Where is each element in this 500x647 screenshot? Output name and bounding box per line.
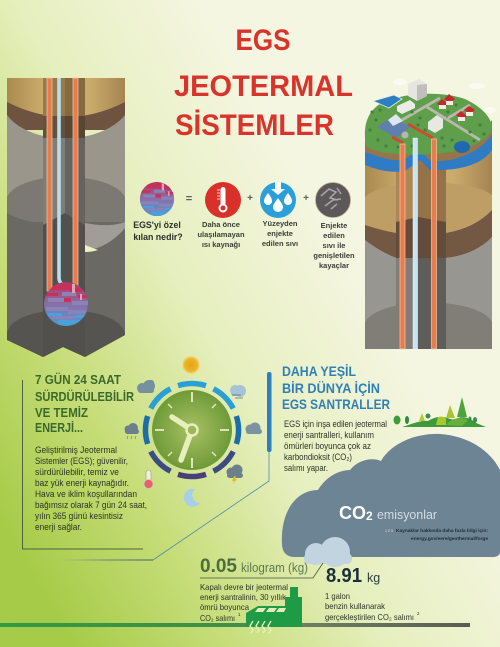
icon: rain cloud	[124, 423, 139, 439]
body: yılın 365 günü kesintisiz	[35, 511, 123, 521]
icon: fractured rock grey	[316, 182, 350, 218]
body: baz yük enerji kaynağıdır.	[35, 478, 129, 488]
connector lines	[60, 450, 269, 561]
ring segments	[129, 367, 255, 493]
faint clouds	[393, 79, 496, 113]
bracket	[22, 380, 143, 549]
houses	[437, 94, 475, 120]
description: 1 galon	[325, 591, 350, 601]
text block: plants: EGS için inşa edilen jeotermal	[284, 419, 387, 429]
label: CO2 emissions: 2	[366, 509, 373, 523]
stat: 0.05 kg	[200, 556, 323, 623]
label: heat source: Daha önce	[202, 220, 240, 229]
body: enerji sağlar.	[35, 522, 82, 532]
description: ömrü boyunca	[200, 602, 249, 612]
white building right	[428, 115, 443, 133]
wells	[400, 138, 436, 349]
label: enhanced rocks: genişletilen	[313, 251, 355, 260]
lake right	[454, 141, 470, 153]
stat: 8.91 kg	[325, 565, 420, 622]
description: enerji santralinin, 30 yıllık	[200, 592, 287, 602]
underline	[200, 563, 323, 578]
icon: thermometer	[205, 182, 241, 218]
ground line	[0, 623, 470, 627]
ground layers	[365, 120, 492, 349]
label: enhanced rocks: Enjekte	[321, 221, 347, 230]
body	[35, 445, 147, 532]
hands	[172, 417, 198, 460]
description: Kapalı devre bir jeotermal	[200, 582, 288, 592]
body: sürdürülebilir, temiz ve	[35, 467, 119, 477]
icon: storm cloud	[226, 464, 243, 484]
equals sign: =	[186, 193, 192, 205]
illustration: right plant cylinder	[365, 79, 496, 349]
clock	[124, 356, 262, 507]
footnote marker: 2	[417, 611, 420, 616]
body: Geliştirilmiş Jeotermal	[35, 445, 117, 455]
dial	[152, 390, 232, 470]
text block: plants: ömürleri boyunca çok az	[284, 441, 371, 451]
surface steam pipes	[392, 124, 433, 143]
description: gerçekleştirilen CO₂ salımı	[325, 612, 414, 622]
footnote: Kaynaklar hakkında daha fazla bilgi için:	[396, 528, 488, 534]
unit: kg	[367, 571, 380, 585]
unit: kilogram (kg)	[241, 560, 308, 575]
icon: factory	[246, 587, 302, 633]
heading: greener world	[282, 363, 390, 412]
heading: greener world: EGS SANTRALLER	[282, 397, 390, 412]
footnote marker: 1	[238, 612, 241, 617]
body: bağımsız olarak 7 gün 24 saat,	[35, 500, 147, 510]
title: SİSTEMLER	[175, 109, 334, 142]
lake	[373, 95, 402, 108]
heading: SÜRDÜRÜLEBİLİR	[35, 389, 135, 404]
label: CO2 emissions	[339, 503, 437, 523]
value: 0.05	[200, 556, 237, 577]
trees	[394, 397, 477, 424]
label: injected fluid: Yüzeyden	[262, 219, 298, 228]
roads	[402, 98, 480, 140]
icon: moon	[184, 489, 200, 507]
plus sign: +	[303, 193, 309, 204]
description: benzin kullanarak	[325, 601, 386, 611]
label: what makes EGS special: kılan nedir?	[133, 232, 183, 242]
trees	[368, 104, 486, 148]
heading: ENERJİ...	[35, 420, 83, 435]
description	[325, 591, 414, 622]
small cloud	[304, 537, 352, 567]
white building	[397, 100, 415, 114]
heat lines	[250, 621, 271, 633]
label: CO2 emissions: emisyonlar	[377, 508, 437, 522]
icon: fractured rock	[140, 182, 174, 216]
description: CO₂ salımı	[200, 613, 235, 623]
heading: 7 GÜN 24 SAAT	[35, 372, 121, 387]
EGS equation	[133, 182, 355, 270]
icon: snow cloud	[246, 422, 262, 434]
illustration: left well cylinder	[7, 78, 125, 357]
icon: water drops	[260, 182, 296, 218]
tower	[408, 79, 427, 101]
title	[174, 24, 353, 142]
label: enhanced rocks: edilen	[323, 231, 345, 240]
description	[200, 582, 288, 623]
blue bar	[267, 372, 272, 452]
text block: plants: karbondioksit (CO₂)	[284, 452, 352, 462]
land surface	[365, 94, 492, 155]
label: CO2 emissions: CO	[339, 503, 366, 523]
text block: plants	[284, 419, 387, 473]
plus sign: +	[247, 193, 253, 204]
label: enhanced rocks: sıvı ile	[323, 241, 345, 250]
heading: greener world: BİR DÜNYA İÇİN	[282, 380, 380, 396]
text block: 7/24 sustainable	[22, 372, 147, 549]
heading: greener world: DAHA YEŞİL	[282, 363, 356, 379]
icon: windy cloud	[230, 385, 246, 398]
icon: thermometer	[144, 470, 153, 488]
CO2 cloud	[282, 434, 500, 557]
icon: sun	[182, 356, 200, 374]
ticks	[155, 392, 229, 468]
body: Sistemler (EGS); güvenilir,	[35, 456, 128, 466]
value: 8.91	[326, 565, 362, 587]
text block: plants: enerji santralleri, kullanım	[284, 430, 374, 440]
label: injected fluid: edilen sıvı	[262, 239, 298, 248]
heading: VE TEMİZ	[35, 405, 88, 420]
fractured rock circle	[44, 282, 88, 326]
heading	[35, 372, 135, 435]
label: enhanced rocks: kayaçlar	[319, 261, 349, 270]
title: JEOTERMAL	[174, 70, 353, 103]
hills	[394, 397, 486, 427]
text block: plants: salımı yapar.	[284, 463, 328, 473]
pipes	[47, 78, 78, 291]
cut-away core	[43, 78, 85, 357]
label: injected fluid: enjekte	[267, 229, 293, 238]
body: Hava ve iklim koşullarından	[35, 489, 137, 499]
footnote: energy.gov/eere/geothermal/forge	[411, 536, 488, 542]
label: heat source: ısı kaynağı	[202, 240, 240, 249]
title: EGS	[236, 24, 290, 57]
footnote markers: 1 2 3	[385, 529, 393, 533]
plant	[377, 114, 410, 138]
label: heat source: ulaşılamayan	[197, 230, 245, 239]
label: what makes EGS special: EGS'yi özel	[133, 220, 181, 230]
icon: cloud with sun	[137, 380, 155, 393]
